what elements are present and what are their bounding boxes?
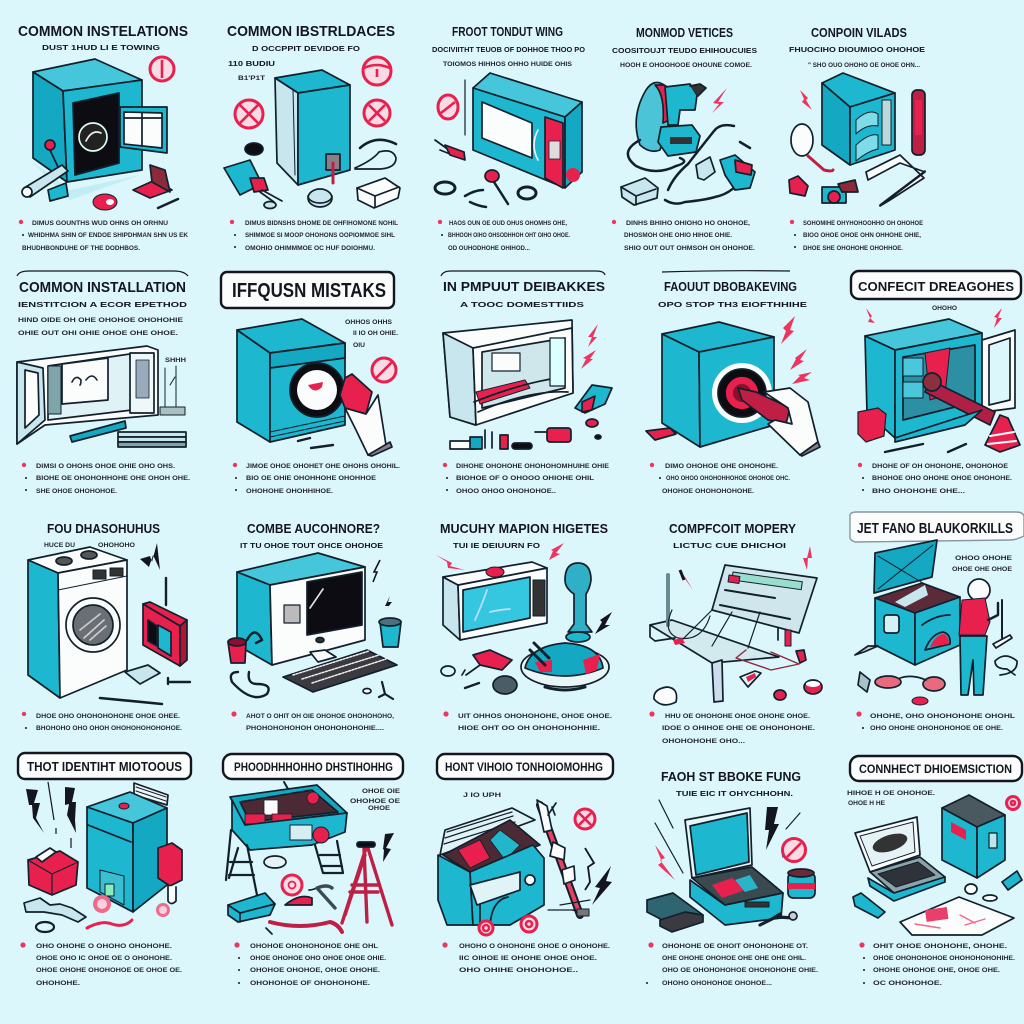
subheading: HOOH E OHOOHOOE OHOUNE COMOE. (620, 62, 752, 69)
icon: oven box and parts (789, 73, 925, 206)
icon: desktop computer (228, 553, 401, 699)
heading box: PHOODHHHOHHO DHSTIHOHHG (234, 762, 393, 774)
panel: in mpuut deibakkes (441, 271, 612, 495)
mistake list: WHIDHMA SHIN OF ENDOE SHIPDHMAN SHN US EK (28, 232, 188, 239)
mistake list (612, 220, 755, 252)
heading box (851, 271, 1021, 299)
subheading: OPO STOP TH3 EIOFTHHIHE (658, 300, 807, 309)
heading box (221, 272, 394, 308)
heading: FROOT TONDUT WING (452, 24, 563, 39)
subheading: HIND OIDE OH OHE OHOHOE OHOHOHIE (18, 317, 184, 324)
mistake list: OHOHOE OHOHOHOHOHE. (662, 488, 754, 495)
mistake list: OHOHOHOHE OHO... (662, 738, 745, 745)
icon: loft scaffold and ladder (226, 782, 392, 934)
subheading: A TOOC DOMESTTIIDS (460, 300, 584, 309)
mistake list (234, 942, 386, 987)
heading: COMBE AUCOHNORE? (247, 521, 380, 536)
side note: OHHOS OHHS (345, 319, 393, 326)
panel: frout dbobaskeving (646, 271, 820, 495)
icon: washing machine and red device (28, 547, 190, 704)
side note (952, 555, 1013, 573)
subheading (789, 45, 925, 69)
heading rule (17, 271, 188, 276)
mistake list: OHOO OHOO OHOHOHOE.. (456, 488, 556, 495)
panel: connhect dhioemsiction (847, 756, 1022, 987)
subheading: OHOHOHO (98, 542, 135, 549)
mistake list: OHOHE OHOHOE OHE, OHOE OHE. (873, 967, 1000, 974)
mistake list: OHOHOHE OHOHHIHOE. (246, 488, 333, 495)
heading box: THOT IDENTIHT MIOTOOUS (27, 759, 182, 774)
icon: washer with gloved hand (237, 319, 392, 456)
subheading: FHUOCIHO DIOUMIOO OHOHOE (789, 45, 925, 54)
icon: warning circles (235, 57, 391, 128)
mistake list: HAOS OUN OE OUD OHUS OHOMHS OHE, (449, 220, 567, 227)
mistake list: OHOHO OHOHOHOE OHOHOE... (662, 980, 772, 987)
heading box (223, 754, 403, 779)
icon: lightning bolts (866, 308, 1002, 328)
mistake list: OHOHO O OHOHOHE OHOE O OHOHOHE. (459, 943, 610, 950)
panel: hont vidrio tonnaidmding (437, 754, 613, 974)
icon: tall cabinet and parts (224, 70, 400, 208)
side note: OHOE OHE OHOE (952, 566, 1013, 573)
subheading: COOSITOUJT TEUDO EHIHOUCUIES (612, 46, 757, 55)
mistake list: OHOE OHOHOHOHOE OHOHOHOHOHIHE. (873, 955, 1015, 962)
mistake list (859, 942, 1015, 987)
mistake list: BIO OE OHIE OHOHHOHE OHOHHOE (246, 475, 377, 482)
mistake list: BHHOOH OIHO OHSODHHOH OHT OIHO OHOE. (448, 232, 570, 239)
heading: COMPFCOIT MOPERY (669, 521, 796, 536)
subheading: LICTUC CUE DHICHOI (673, 541, 786, 550)
icon: warning circle (372, 358, 396, 382)
icon: warning strokes (680, 546, 812, 590)
heading box (850, 756, 1022, 781)
heading: MUCUHY MAPION HIGETES (440, 521, 608, 536)
mistake list: DIMO OHOHOE OHE OHOHOHE. (665, 463, 778, 470)
side note (847, 790, 935, 807)
mistake list (438, 220, 570, 252)
icon: open chest and person (855, 540, 1017, 705)
mistake list: BHUDHBONDUHE OF THE DODHBOS. (22, 245, 140, 252)
icon: microwave, blender, bowl (441, 562, 609, 694)
mistake list: HIOE OHT OO OH OHOHOHOHHIE. (458, 725, 600, 732)
panel: common instalations (18, 23, 188, 252)
mistake list (649, 711, 815, 745)
mistake list: OHIT OHOE OHOHOHE, OHOHE. (873, 943, 1007, 950)
mistake list: OHO OE OHOHOHOHOE OHOHOHOHE OHIE. (662, 967, 818, 974)
icon: black lightning (383, 833, 394, 862)
icon: microwave and tools (435, 73, 582, 207)
mistake list (19, 220, 188, 252)
subheading: HUCE DU (44, 542, 75, 549)
mistake list: SHE OHOE OHOHOHOE. (36, 488, 117, 495)
heading: COMMON INSTELATIONS (18, 23, 188, 40)
subheading: DOCIVIITHT TEUOB OF DOHHOE THOO PO (432, 45, 585, 54)
icon: open suitcase and items (647, 800, 815, 932)
icon: lightning bolts (655, 807, 779, 880)
mistake list: HHU OE OHOHOHE OHOE OHOHE OHOE. (665, 713, 810, 720)
side note: 110 BUDIU (228, 59, 275, 68)
subheading: IT TU OHOE TOUT OHCE OHOHOE (240, 541, 383, 550)
small label: SHHH (165, 357, 186, 364)
mistake list: IIC OIHOE IE OHOHE OHOE OHOE. (459, 955, 597, 962)
panel: compfcoit mopery (649, 521, 822, 745)
subheading (18, 300, 188, 337)
subheading: TUIE EIC IT OHYCHHOHN. (676, 789, 793, 798)
mistake list: AHOT O OHIT OH OIE OHOHOE OHOHOHOHO, (246, 713, 394, 720)
icon: black lightning bolts (585, 848, 612, 905)
mistake list: OHOHOE OHOHOE, OHOE OHOHE. (250, 967, 380, 974)
mistake list (790, 220, 924, 252)
side note: B1'P1T (238, 75, 265, 82)
icon: washer and hand (646, 322, 820, 456)
heading rule (662, 271, 790, 272)
heading: FAOH ST BBOKE FUNG (661, 769, 801, 784)
heading: FAOUUT DBOBAKEVING (664, 279, 797, 294)
heading box (850, 512, 1024, 542)
side note: OHOHOE OE (350, 798, 401, 805)
subheading: IENSTITCION A ECOR EPETHOD (18, 300, 188, 309)
subheading (44, 542, 135, 549)
icon: toolbox and wrench (438, 800, 590, 925)
mistake list (858, 463, 1012, 495)
mistake list (646, 942, 818, 987)
mistake list: PHOHOHOHOHOH OHOHOHOHOHIE.... (246, 725, 384, 732)
panel: confecit dreawones (851, 271, 1021, 495)
icon: black lightning bolts (26, 782, 76, 848)
mistake list: BHO OHOHOHE OHE... (872, 488, 965, 495)
panel: prodomindingo destidonng (223, 754, 403, 987)
mistake list (443, 711, 612, 732)
subheading: TOIOMOS HIHHOS OHHO HUIDE OHIS (443, 61, 573, 68)
subheading: TUI IE DEIUURN FO (453, 541, 540, 550)
panel: conpoin vilads (789, 25, 925, 252)
heading box: HONT VIHOIO TONHOIOMOHHG (445, 760, 603, 774)
side note: HIHOE H OE OHOHOE. (847, 790, 935, 797)
mistake list: BHOHOE OHO OHOHE OHOE OHOHOHE. (872, 475, 1012, 482)
mistake list: OHOHOHE. (36, 980, 80, 987)
icon: warning circle (150, 57, 174, 81)
side note: OHOE OIE (362, 788, 401, 795)
mistake list: SHIO OUT OUT OHMSOH OH OHOHOE. (624, 245, 755, 252)
subheading: DUST 1HUD LI E TOWING (42, 43, 160, 52)
heading box: IFFQUSN MISTAKS (232, 280, 386, 302)
heading: MONMOD VETICES (636, 25, 733, 40)
mistake list: JIMOE OHOE OHOHET OHE OHOHS OHOHIL. (246, 463, 400, 470)
mistake list: DIMUS GOUNTHS WUD OHNS OH ORHNU (32, 220, 168, 227)
heading: CONPOIN VILADS (811, 25, 907, 40)
mistake list: DIMSI O OHOHS OHOE OHIE OHO OHS. (36, 463, 175, 470)
mistake list (22, 712, 182, 732)
heading box: CONNHECT DHIOEMSICTION (859, 762, 1012, 776)
mistake list: OHO OHOHE O OHOHO OHOHOHE. (36, 943, 172, 950)
heading: COMMON IBSTRLDACES (227, 23, 395, 40)
mistake list (856, 711, 1015, 732)
mistake list: IDOE O OHIHOE OHE OE OHOHOHOHE. (662, 725, 815, 732)
icon: dismantled oven and tools (443, 320, 612, 449)
mistake list (230, 220, 398, 252)
icon: small bolts (373, 560, 392, 611)
mistake list: SOHOMIHE OHYHOHOOHHO OH OHOHOE (803, 220, 924, 227)
panel: frost tondut wing (432, 24, 585, 252)
icon: open microwave (17, 346, 186, 447)
icon: cabinet with door and bag (858, 319, 1020, 452)
mistake list: BIOHOE OF O OHOOO OHIOHE OHIL (456, 475, 594, 482)
side note (228, 59, 275, 82)
mistake list (22, 463, 190, 495)
mistake list: OHOHOE OHOHOHOHOE OHE OHL (250, 943, 378, 950)
icon: collapsed table and papers (650, 565, 822, 705)
icon: lightning bolts (781, 316, 812, 384)
icon: lightning bolts (436, 543, 612, 634)
panel: mornod vetices (612, 25, 757, 252)
panel: thot identity microbus (18, 753, 191, 987)
mistake list (443, 463, 610, 495)
panel: jet fano blaukorkills (850, 512, 1024, 732)
mistake list: OC OHOHOHOE. (873, 980, 942, 987)
panel: common installation (17, 271, 190, 495)
side note: OHOO OHOHE (955, 555, 1013, 562)
subheading (432, 45, 585, 68)
mistake list: DIHOHE OHOHOHE OHOHOHOMHUIHE OHIE (456, 463, 610, 470)
icon: lightning (800, 90, 812, 110)
side note: OIU (353, 342, 365, 349)
panel: ifequsn mistaks (221, 272, 400, 495)
subheading: OHIE OUT OHI OHIE OHOE OHE OHOE. (18, 330, 178, 337)
mistake list (231, 711, 394, 732)
icon: warning circle (782, 838, 806, 862)
icon: laptop, box, paper (853, 795, 1022, 935)
mistake list: UIT OHHOS OHOHOHOHE, OHOE OHOE. (458, 713, 612, 720)
heading box (18, 753, 191, 779)
icon: lightning bolts (581, 324, 598, 369)
panel: combe aucohnohe (228, 521, 401, 732)
panel: mucuny mapion higetes (436, 521, 612, 732)
mistake list: OHOHE, OHO OHOHOHOHE OHOHL (870, 713, 1015, 720)
mistake list: DHOHE OF OH OHOHOHE, OHOHOHOE (872, 463, 1009, 470)
mistake list (20, 942, 182, 987)
heading rule (441, 271, 605, 276)
mistake list: DHOE OHO OHOHOHOHOHE OHOE OHEE. (36, 713, 180, 720)
mistake list: OHOHOHE OE OHOIT OHOHOHOHE OT. (662, 943, 808, 950)
mistake list (650, 463, 790, 495)
icon: black lightning (140, 543, 160, 570)
panel: faon st bboke fung (646, 769, 818, 987)
mistake list: DIMUS BIDNSHS DHOME DE OHFIHOMONE NOHIL (245, 220, 398, 227)
icon: warning circles (479, 809, 595, 935)
mistake list: DHOSMOH OHE OHIO HIHOE OHIE. (624, 232, 732, 239)
mistake list: DHOE SHE OHOHOHE OHOHHOE. (803, 245, 903, 252)
icon: warning circle (438, 95, 458, 119)
icon: drill, hose and parts (612, 82, 755, 205)
mistake list: DINHS BHIHO OHIOHO HO OHOHOE, (626, 220, 750, 227)
heading box: CONFECIT DREAGOHES (858, 279, 1014, 294)
mistake list: OHOE OHOHE OHOHOHOE OE OHOE OE. (36, 967, 182, 974)
heading: FOU DHASOHUHUS (47, 521, 160, 536)
mistake list: BIOHE OE OHOHOHHOHE OHE OHOH OHE. (36, 475, 190, 482)
subheading: D OCCPPIT DEVIDOE FO (252, 44, 360, 53)
panel: fou dhasohumus (22, 521, 190, 732)
mistake list: BHOHOHO OHO OHOH OHOHOHOHOHOHOE. (36, 725, 182, 732)
side note (350, 788, 401, 812)
panel: common installaces (224, 23, 400, 252)
mistake list (233, 463, 400, 495)
mistake list: OMOHIO OHIMMMOE OC HUF DOIOHMU. (245, 245, 375, 252)
mistake list: OHE OHOHE OHOHOE OHE OHE OHE OHIL. (662, 955, 806, 962)
mistake list: OHO OHOO OHOHOHHOHOE OHOHOE OHC. (666, 475, 790, 482)
subheading (612, 46, 757, 69)
mistake list: OHO OHOHE OHOHOHOHOE OE OHE. (870, 725, 1003, 732)
icon: cyan fridge and red boxes (24, 783, 182, 932)
mistake list: OHOE OHOHOE OHO OHOE OHOE OHIE. (250, 955, 386, 962)
mistake list: OHO OHIHE OHOHOHOE.. (459, 967, 578, 974)
heading: IN PMPUUT DEIBAKKES (443, 279, 605, 294)
small caption: J IO UPH (463, 792, 501, 799)
side note (345, 319, 398, 349)
mistake list: SHIMMOE SI MOOP OHOHONS OOPIOMMOE SIHL (245, 232, 395, 239)
mistake list: OHOE OHO IC OHOE OE O OHOHOHE. (36, 955, 172, 962)
icon: open cabinet appliance (22, 59, 178, 210)
mistake list: BIOO OHOE OHOE OHN OHHOHE OHIE, (803, 232, 921, 239)
heading box (437, 754, 613, 779)
mistake list (442, 942, 610, 974)
mistake list: OD OUHODHOHE OHIHOD... (448, 245, 530, 252)
side note: OHOE H HE (848, 800, 886, 807)
side note: OHOE (368, 805, 391, 812)
subheading: " SHO OUO OHOHO OE OHOE OHN... (808, 62, 920, 69)
small caption: OHOHO (932, 305, 957, 312)
side note: II IO OH OHIE. (353, 330, 398, 337)
mistake list: OHOHOHOE OF OHOHOHOHE. (250, 980, 370, 987)
icon: lightning (712, 88, 727, 113)
heading: COMMON INSTALLATION (19, 279, 186, 296)
icon: warning circle (1006, 796, 1020, 810)
